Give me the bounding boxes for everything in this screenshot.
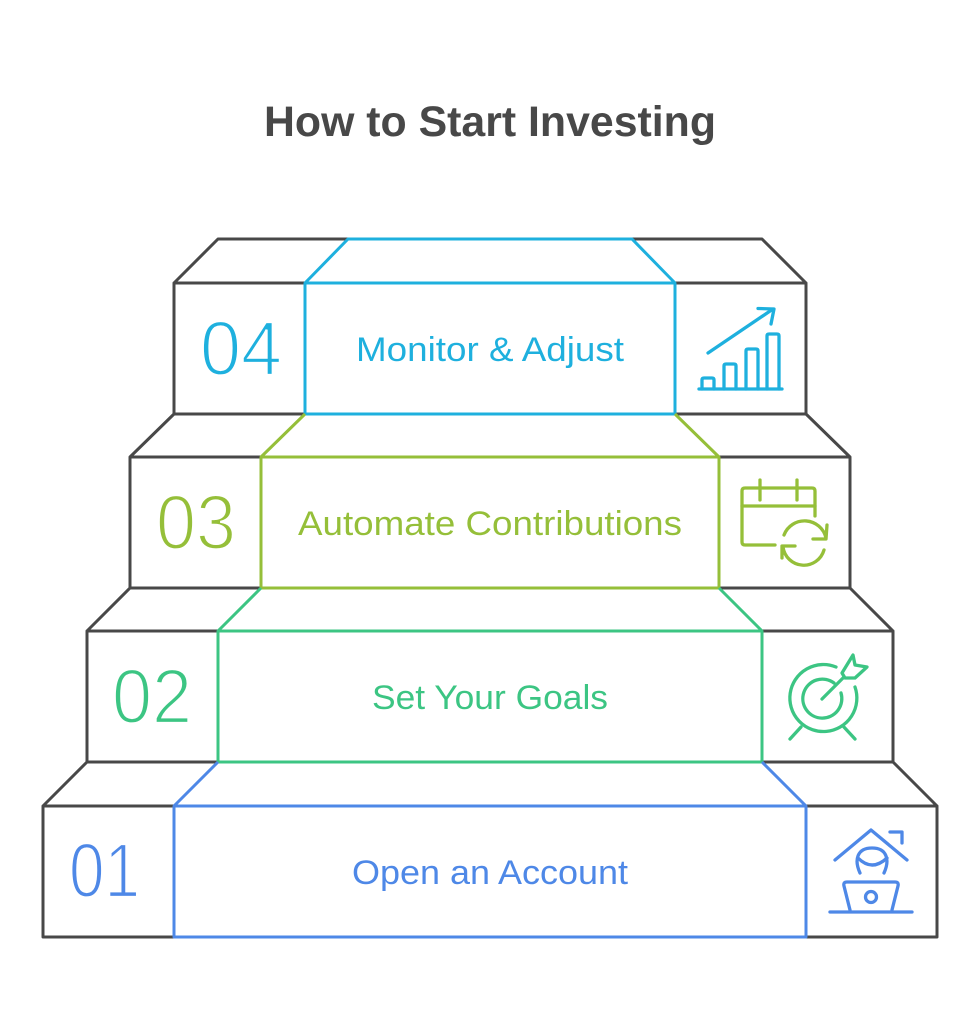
step 4 frame	[174, 239, 806, 414]
step 2 panel	[218, 588, 762, 762]
step 1 label: Open an Account	[352, 854, 629, 892]
icon: target with arrow	[790, 655, 867, 739]
icon: growth chart	[699, 308, 782, 389]
step 4 label: Monitor & Adjust	[356, 331, 625, 369]
number 04: 04	[200, 306, 282, 392]
number 01: 01	[69, 828, 140, 914]
step 4 panel	[305, 239, 675, 414]
step 1 frame	[43, 762, 937, 937]
number 02: 02	[112, 654, 192, 740]
title: How to Start Investing	[264, 98, 716, 146]
number 03: 03	[156, 480, 236, 566]
step 3 frame	[130, 414, 850, 588]
step 2 frame	[87, 588, 893, 762]
step 2 label: Set Your Goals	[372, 679, 608, 717]
step 3 label: Automate Contributions	[298, 505, 682, 543]
step 1 panel	[174, 762, 806, 937]
icon: house and laptop	[830, 830, 912, 912]
icon: recurring calendar	[742, 480, 827, 565]
step 3 panel	[261, 414, 719, 588]
